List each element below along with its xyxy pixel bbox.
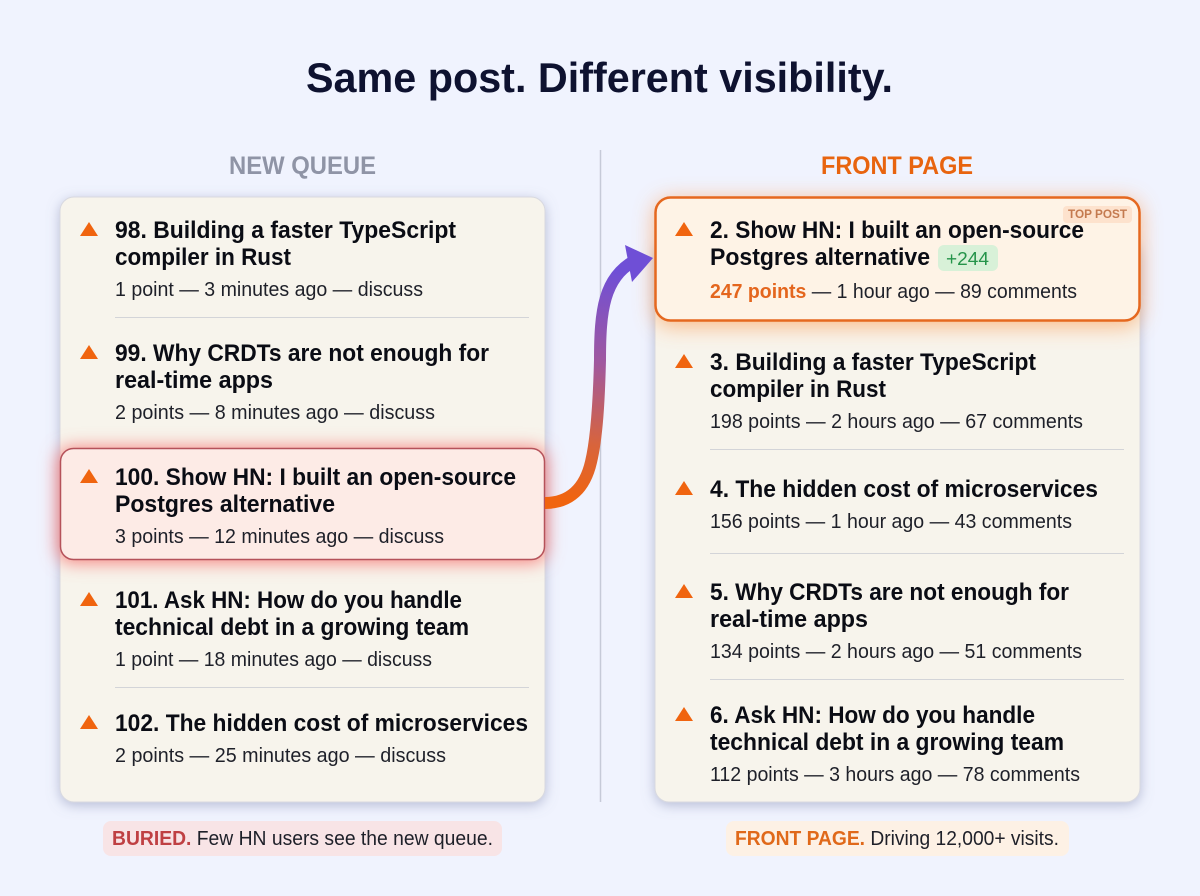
list item 101: 1 point — 18 minutes ago — discuss <box>115 649 432 671</box>
list item 101 <box>80 587 469 671</box>
caption: buried: BURIED. Few HN users see the new queue. <box>112 828 493 850</box>
list item 3: 198 points — 2 hours ago — 67 comments <box>710 411 1083 433</box>
badge: +244 <box>938 245 998 271</box>
list item 6 <box>675 702 1080 786</box>
badge: top post <box>1063 206 1132 223</box>
list item 98: compiler in Rust <box>115 244 291 271</box>
highlighted post: rank 2 <box>655 198 1140 326</box>
list item 4: 156 points — 1 hour ago — 43 comments <box>710 511 1072 533</box>
heading: front page: FRONT PAGE <box>821 152 973 180</box>
list item 5: 134 points — 2 hours ago — 51 comments <box>710 641 1082 663</box>
list item 6: 112 points — 3 hours ago — 78 comments <box>710 764 1080 786</box>
badge: top post: TOP POST <box>1068 209 1127 221</box>
list item 3: 3. Building a faster TypeScript <box>710 349 1036 376</box>
caption: buried <box>103 821 502 856</box>
list item 99: real-time apps <box>115 367 273 394</box>
list item 3: compiler in Rust <box>710 376 886 403</box>
list item 6: technical debt in a growing team <box>710 729 1064 756</box>
list item 5 <box>675 579 1082 663</box>
list item 101: 101. Ask HN: How do you handle <box>115 587 462 614</box>
caption: front page: FRONT PAGE. Driving 12,000+ visits. <box>735 828 1059 850</box>
title: Same post. Different visibility. <box>306 54 893 101</box>
panel: new queue <box>60 197 545 802</box>
list item 102: 102. The hidden cost of microservices <box>115 710 528 737</box>
highlighted post: rank 100: 3 points — 12 minutes ago — discuss <box>115 526 444 548</box>
highlighted post: rank 100 <box>58 448 546 562</box>
list item 102: 2 points — 25 minutes ago — discuss <box>115 745 446 767</box>
list item 4 <box>675 476 1098 533</box>
list item 3 <box>675 349 1083 433</box>
list item 101: technical debt in a growing team <box>115 614 469 641</box>
arrow: new queue to front page <box>545 245 653 503</box>
highlighted post: rank 100: 100. Show HN: I built an open-source <box>115 464 516 491</box>
list item 4: 4. The hidden cost of microservices <box>710 476 1098 503</box>
list item 102 <box>80 710 528 767</box>
highlighted post: rank 100: Postgres alternative <box>115 491 335 518</box>
panel: front page <box>655 240 1140 802</box>
list item 99 <box>80 340 489 424</box>
highlighted post: rank 2: 247 points — 1 hour ago — 89 comments <box>710 281 1077 303</box>
highlighted post: rank 2: 2. Show HN: I built an open-source <box>710 217 1084 244</box>
list item 99: 2 points — 8 minutes ago — discuss <box>115 402 435 424</box>
list item 98: 1 point — 3 minutes ago — discuss <box>115 279 423 301</box>
list item 98: 98. Building a faster TypeScript <box>115 217 456 244</box>
caption: front page <box>726 821 1069 856</box>
list item 5: 5. Why CRDTs are not enough for <box>710 579 1069 606</box>
list item 98 <box>80 217 456 301</box>
badge: +244: +244 <box>946 249 989 269</box>
heading: new queue: NEW QUEUE <box>229 152 376 180</box>
list item 99: 99. Why CRDTs are not enough for <box>115 340 489 367</box>
list item 6: 6. Ask HN: How do you handle <box>710 702 1035 729</box>
list item 5: real-time apps <box>710 606 868 633</box>
highlighted post: rank 2: Postgres alternative <box>710 244 930 271</box>
